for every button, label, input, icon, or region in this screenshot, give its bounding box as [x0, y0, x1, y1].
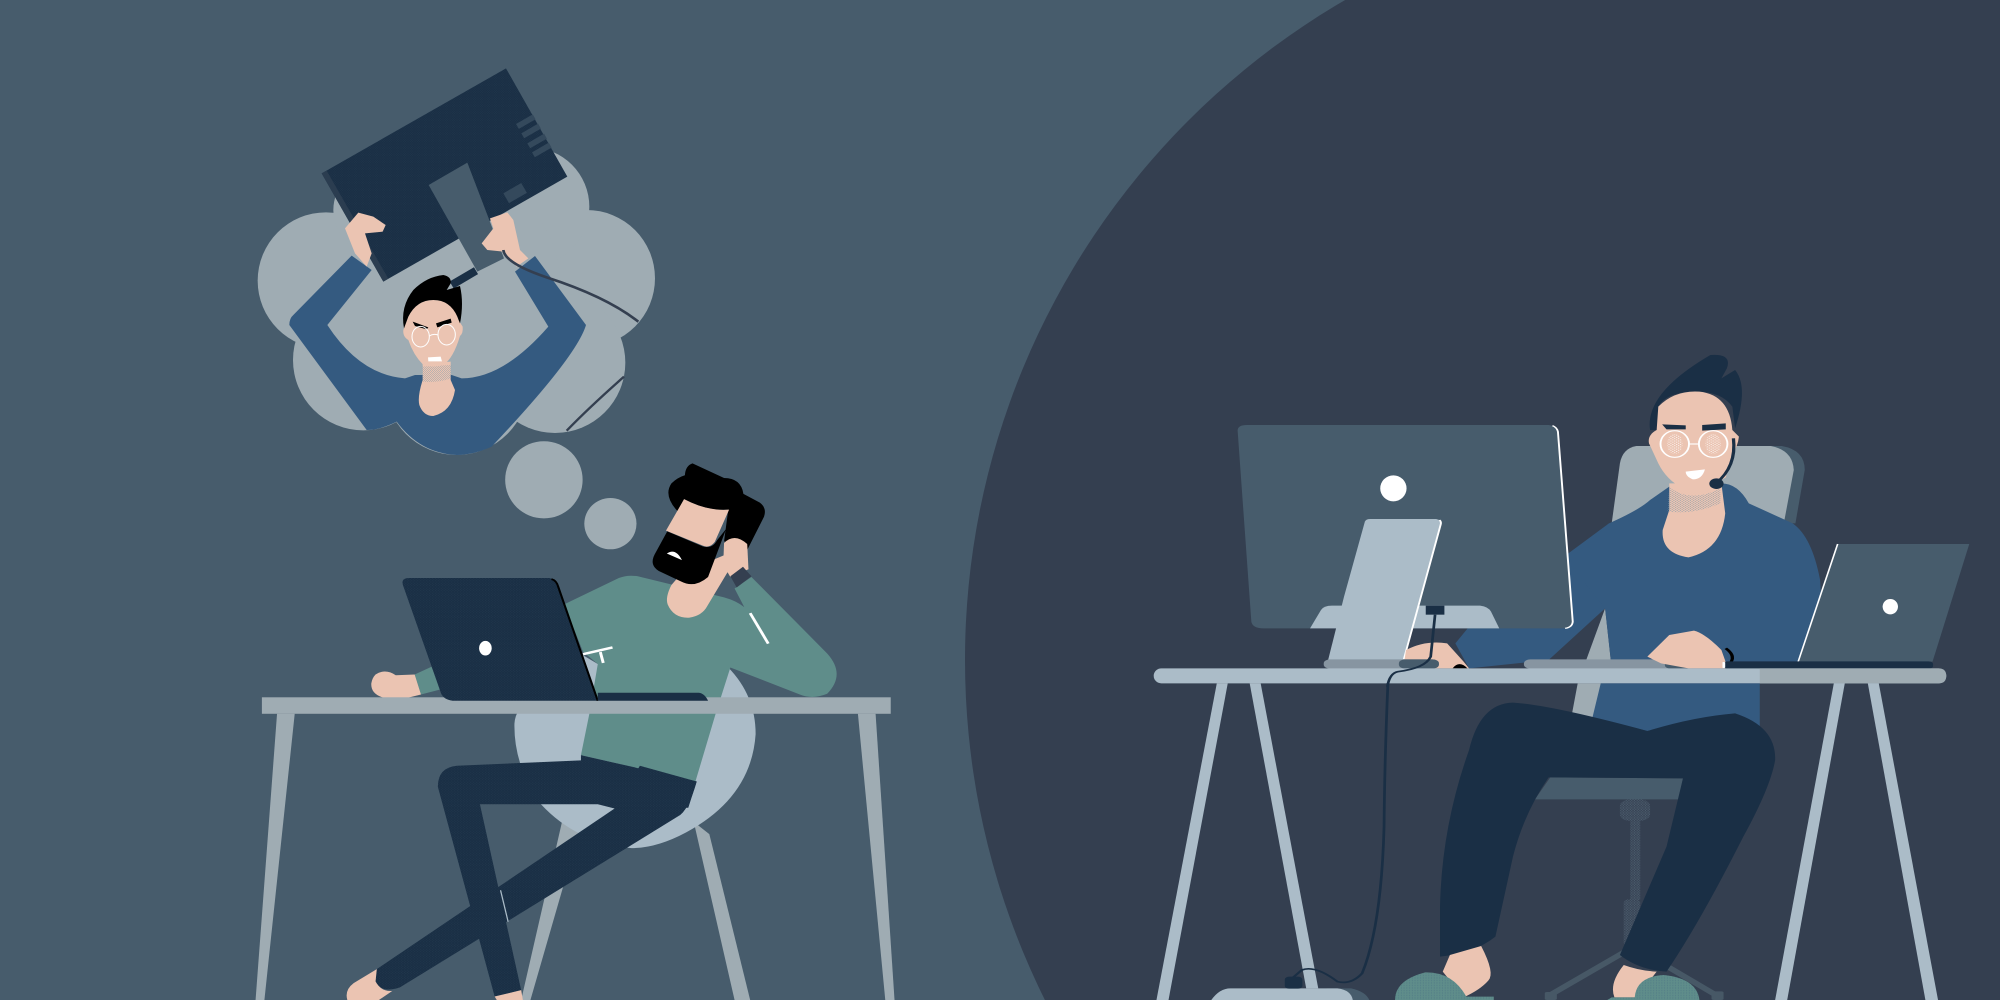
smile [1686, 469, 1705, 479]
table left leg [256, 714, 295, 1000]
angry man hair [403, 275, 462, 328]
back leg [376, 766, 697, 990]
vents [503, 114, 552, 203]
front leg [438, 755, 697, 996]
sweater [564, 576, 837, 781]
white sweater marks [583, 613, 768, 663]
monitor cable lower [1285, 683, 1388, 989]
sleeve [415, 667, 441, 694]
keyboard left [1324, 659, 1439, 669]
chair column and base [1545, 799, 1724, 1000]
dark circle background [965, 0, 2000, 1000]
left hand [1403, 642, 1469, 668]
neck and ear hand [667, 555, 728, 618]
monitor cable upper [1387, 615, 1435, 687]
support agent upper scene [1154, 355, 1969, 687]
monitor stand [429, 163, 504, 272]
table top [262, 697, 891, 714]
angry eyebrows [413, 319, 452, 329]
glasses [1660, 431, 1727, 457]
desk top [1154, 668, 1946, 683]
chair back shadow [1623, 446, 1805, 523]
neck stipple [422, 365, 452, 382]
lower cable [567, 377, 624, 431]
left hand [345, 213, 386, 267]
neck [1663, 483, 1725, 557]
right foot [1613, 965, 1657, 997]
laptop [1722, 544, 1969, 669]
desk left legs [1156, 683, 1318, 1000]
monitor plug [452, 271, 476, 285]
right hand [1647, 631, 1728, 668]
laptop [402, 578, 708, 701]
watch [1726, 648, 1732, 662]
left foot [347, 969, 392, 1000]
thought bubble scene [258, 68, 655, 455]
chair strip [1583, 608, 1612, 668]
neck stipple [1668, 487, 1720, 512]
monitor cable [503, 250, 638, 322]
torso [1568, 483, 1826, 668]
angry man neck [419, 362, 455, 416]
mouth [667, 552, 682, 560]
face [1649, 392, 1739, 488]
hand on desk [371, 672, 421, 698]
table right leg [858, 714, 895, 1000]
cuff [730, 567, 751, 588]
right hand [482, 212, 528, 267]
monitor thrown overhead [322, 68, 567, 285]
desktop monitor [1238, 425, 1573, 628]
support agent lower scene [1156, 683, 1938, 1000]
left foot [1443, 946, 1491, 997]
white sliver [501, 890, 508, 922]
chair strip [1572, 683, 1606, 718]
keyboard right [1524, 659, 1695, 669]
mouse [1453, 664, 1467, 668]
gritted teeth [428, 357, 442, 361]
desk right legs [1775, 683, 1938, 1000]
hand at head [723, 538, 748, 577]
cable clip [1426, 606, 1444, 615]
headset [1709, 438, 1734, 489]
left slipper [1395, 972, 1494, 1000]
trousers [1440, 703, 1775, 972]
blue arm [1455, 523, 1609, 668]
chair seat [514, 655, 756, 848]
chair back [1612, 446, 1794, 523]
thought bubble large [505, 441, 583, 518]
angry man face [403, 300, 463, 367]
thought cloud [258, 147, 655, 455]
glasses [412, 324, 455, 347]
angry man torso and arms [289, 256, 586, 455]
right slipper [1607, 975, 1699, 1000]
chair seat [1535, 777, 1683, 799]
power box [1211, 988, 1369, 1000]
torso lower [1592, 683, 1760, 731]
monitor stand front [1328, 519, 1441, 660]
beard [653, 529, 726, 584]
hair [668, 463, 765, 550]
chair legs [521, 822, 750, 1000]
eyebrows [1662, 423, 1726, 431]
face [666, 499, 729, 547]
right foot [495, 990, 523, 1000]
hair [1650, 355, 1742, 430]
stressed man scene [256, 441, 895, 1000]
thought bubble small [584, 498, 637, 549]
